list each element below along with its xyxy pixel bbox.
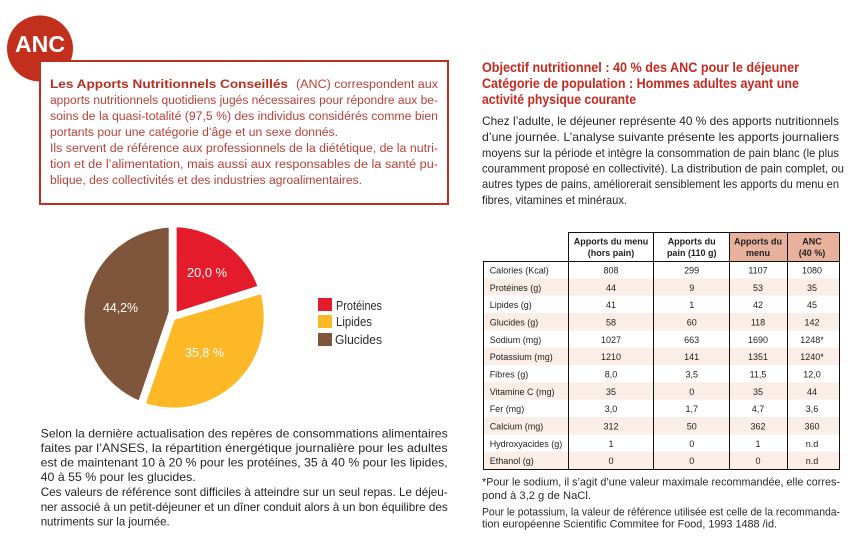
text block: lunch analysis <box>482 114 844 207</box>
column: apports du menu hors pain: 35 <box>606 387 616 397</box>
column: apports du pain: 0 <box>689 439 694 449</box>
column: apports du menu hors pain: 8,0 <box>605 370 617 380</box>
slice: Lipides 35,8 %: 35,8 % <box>185 345 224 360</box>
table row labels: Protéines (g) <box>490 283 541 293</box>
table row labels: Glucides (g) <box>490 318 538 328</box>
column: apports du pain: 299 <box>684 266 699 276</box>
text block: ANC definition: apports nutritionnels quotidiens jugés nécessaires pour répondre aux be- <box>50 95 438 107</box>
column: ANC 40 %: 3,6 <box>806 404 818 414</box>
table header: menu <box>746 248 770 258</box>
text block: lunch analysis: Chez l’adulte, le déjeuner représente 40 % des apports nutritionnels <box>482 114 839 128</box>
heading: nutritional objective: activité physique courante <box>482 92 636 107</box>
text block: ANC definition: tion et de l’alimentation, mais aussi aux responsables de la santé pu- <box>50 159 438 171</box>
column: apports du pain: 1 <box>689 300 694 310</box>
table header: ANC <box>802 236 822 246</box>
heading: nutritional objective: Catégorie de population : Hommes adultes ayant une <box>482 76 799 91</box>
text block: ANC definition: Les Apports Nutritionnels Conseillés <box>50 79 288 91</box>
column: ANC 40 % <box>800 266 824 466</box>
table row labels: Fer (mg) <box>490 404 524 414</box>
heading: nutritional objective <box>482 60 800 107</box>
text block: ANSES recommendations <box>41 427 448 529</box>
slice: Glucides 44,2 %: 44,2% <box>103 300 138 315</box>
column: apports du menu hors pain: 0 <box>608 456 614 466</box>
column: apports du menu: 4,7 <box>752 404 764 414</box>
column: ANC 40 %: 35 <box>807 283 817 293</box>
legend: Protéines <box>336 299 382 313</box>
column: ANC 40 %: 45 <box>807 300 817 310</box>
column: apports du pain: 0 <box>689 387 694 397</box>
column: apports du menu hors pain: 58 <box>606 318 616 328</box>
column: ANC 40 %: 44 <box>807 387 817 397</box>
column: apports du menu: 53 <box>753 283 763 293</box>
table row labels <box>490 266 562 466</box>
column: apports du menu: 1351 <box>748 352 768 362</box>
footnotes: pond à 3,2 g de NaCl. <box>482 490 591 502</box>
table row labels: Lipides (g) <box>490 300 532 310</box>
column: apports du menu <box>748 266 768 466</box>
text block: ANSES recommendations: Selon la dernière actualisation des repères de consommations alimentaires <box>41 427 448 441</box>
column: apports du menu: 118 <box>751 318 765 328</box>
column: apports du menu hors pain: 44 <box>606 283 616 293</box>
column: apports du menu hors pain: 808 <box>603 266 619 276</box>
slice: Lipides 35,8 % <box>146 294 264 408</box>
table header: (hors pain) <box>588 248 634 258</box>
column: apports du menu: 362 <box>750 422 766 432</box>
column: apports du pain: 50 <box>687 422 697 432</box>
column: apports du menu: 0 <box>755 456 761 466</box>
table row labels: Sodium (mg) <box>490 335 541 345</box>
column: apports du pain: 0 <box>689 456 694 466</box>
text block: ANSES recommendations: faites par l’ANSES, la répartition énergétique journalière pour les adultes <box>41 441 448 455</box>
legend: Lipides <box>336 315 372 329</box>
heading: nutritional objective: Objectif nutritionnel : 40 % des ANC pour le déjeuner <box>482 60 800 75</box>
column: ANC 40 %: n.d <box>806 439 818 449</box>
column: apports du menu: 1107 <box>748 266 768 276</box>
table: nutritional intake <box>483 232 840 470</box>
table row labels: Calcium (mg) <box>490 422 543 432</box>
table row labels: Calories (Kcal) <box>490 266 549 276</box>
column: ANC 40 %: 1248* <box>800 335 824 345</box>
table header: Apports du menu <box>574 236 648 246</box>
text block: lunch analysis: d’une journée. L’analyse suivante présente les apports journaliers <box>482 130 839 144</box>
slice: Protéines 20,0 %: 20,0 % <box>187 265 227 280</box>
text block: ANSES recommendations: ner associé à un petit-déjeuner et un dîner conduit alors à un bon équilibre des <box>41 500 448 514</box>
text block: ANC definition <box>50 79 438 187</box>
legend: Glucides <box>335 333 382 347</box>
footnotes <box>482 477 840 531</box>
table row labels: Vitamine C (mg) <box>490 387 555 397</box>
column: apports du menu: 1 <box>755 439 761 449</box>
column: apports du pain: 3,5 <box>685 370 698 380</box>
table header: Apports du <box>668 236 716 246</box>
table header <box>574 236 825 258</box>
column: apports du menu: 1690 <box>748 335 768 345</box>
column: apports du pain: 1,7 <box>685 404 698 414</box>
panel: ANC definition <box>40 61 448 204</box>
text block: ANC definition: soins de la quasi-totalité (97,5 %) des individus considérés comme bien <box>50 111 438 123</box>
column: ANC 40 %: 142 <box>804 318 820 328</box>
column: apports du menu hors pain: 1210 <box>601 352 621 362</box>
column: apports du menu hors pain: 41 <box>606 300 616 310</box>
table header: Apports du <box>734 236 782 246</box>
table row labels: Potassium (mg) <box>490 352 553 362</box>
text block: ANSES recommendations: Ces valeurs de référence sont difficiles à atteindre sur un seul repas. Le déjeu- <box>41 485 448 499</box>
text block: ANSES recommendations: nutriments sur la journée. <box>41 515 170 529</box>
text block: lunch analysis: fibres, vitamines et minéraux. <box>482 193 627 207</box>
pie chart: energy distribution <box>85 227 264 408</box>
table row labels: Fibres (g) <box>490 370 528 380</box>
footnotes: Pour le potassium, la valeur de référence utilisée est celle de la recommanda- <box>482 507 840 519</box>
column: apports du menu hors pain <box>601 266 621 466</box>
table header: pain (110 g) <box>667 248 716 258</box>
text block: ANC definition: blique, des collectivités et des industries agroalimentaires. <box>50 175 362 187</box>
text block: ANSES recommendations: 40 à 55 % pour les glucides. <box>41 470 196 484</box>
column: apports du menu hors pain: 1027 <box>601 335 621 345</box>
column: ANC 40 %: 12,0 <box>803 370 821 380</box>
badge: ANC <box>7 16 73 82</box>
column: apports du menu hors pain: 312 <box>603 422 619 432</box>
column: apports du pain: 60 <box>687 318 697 328</box>
table row labels: Hydroxyacides (g) <box>490 439 562 449</box>
column: ANC 40 %: 1080 <box>802 266 822 276</box>
column: ANC 40 %: 1240* <box>800 352 824 362</box>
column: apports du menu: 11,5 <box>750 370 766 380</box>
footnotes: tion européenne Scientific Commitee for Food, 1993 1488 /id. <box>482 519 777 531</box>
legend <box>318 298 382 347</box>
slice: Protéines 20,0 % <box>177 227 257 312</box>
table header: (40 %) <box>799 248 825 258</box>
column: apports du pain: 663 <box>684 335 699 345</box>
column: ANC 40 %: 360 <box>804 422 820 432</box>
column: apports du menu hors pain: 1 <box>608 439 614 449</box>
footnotes: *Pour le sodium, il s’agit d’une valeur maximale recommandée, elle corres- <box>482 477 840 489</box>
column: apports du pain <box>684 266 699 466</box>
column: apports du menu hors pain: 3,0 <box>605 404 617 414</box>
text block: ANC definition: (ANC) correspondent aux <box>296 79 438 91</box>
column: apports du pain: 9 <box>689 283 694 293</box>
column: apports du pain: 141 <box>684 352 699 362</box>
text block: ANSES recommendations: est de maintenant 10 à 20 % pour les protéines, 35 à 40 % pour les lipides, <box>41 456 448 470</box>
column: apports du menu: 35 <box>753 387 763 397</box>
table row labels: Ethanol (g) <box>490 456 534 466</box>
badge: ANC: ANC <box>15 31 65 57</box>
text block: ANC definition: portants pour une catégorie d’âge et un sexe donnés. <box>50 127 338 139</box>
column: apports du menu: 42 <box>753 300 763 310</box>
slice: Glucides 44,2 % <box>85 228 169 400</box>
column: ANC 40 %: n.d <box>806 456 818 466</box>
text block: ANC definition: Ils servent de référence aux professionnels de la diététique, de la nutri- <box>50 143 438 155</box>
